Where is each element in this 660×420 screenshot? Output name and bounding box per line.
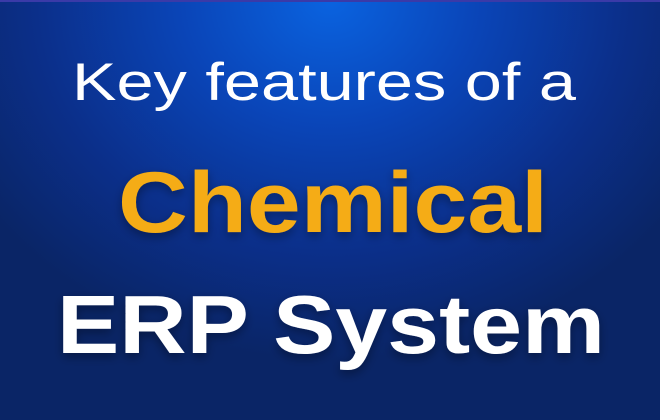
heading line 2: Chemical: Chemical	[118, 155, 548, 251]
heading line 3: ERP System: ERP System	[57, 278, 605, 371]
heading line 1: Key features of a	[72, 53, 577, 112]
